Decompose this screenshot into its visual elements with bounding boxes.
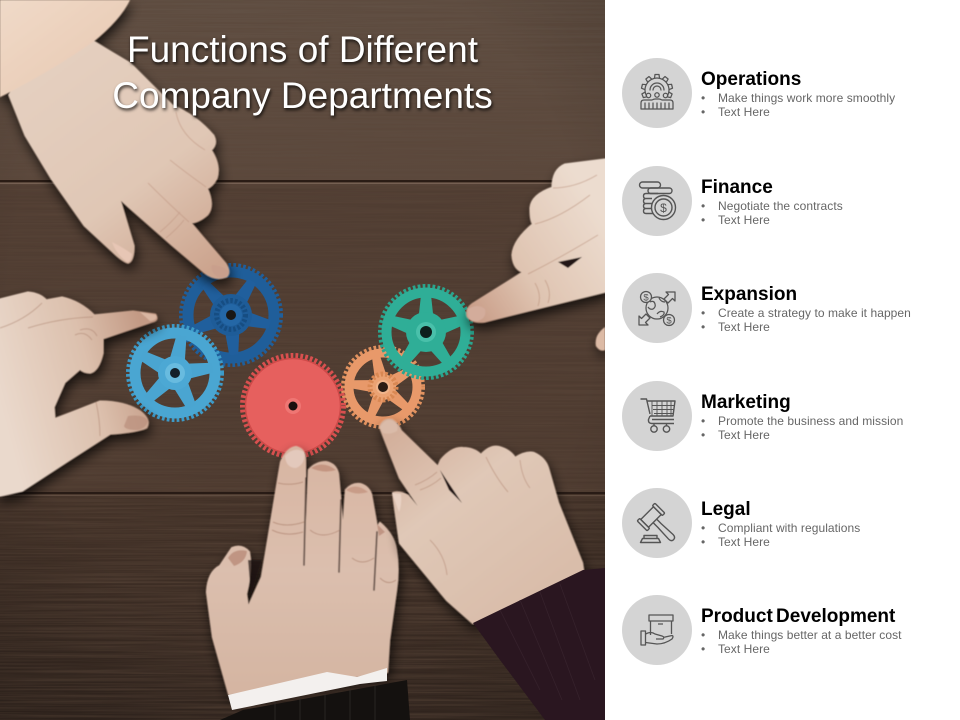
icon: stacked coins: $ xyxy=(660,201,667,215)
heading: Product Development xyxy=(701,606,895,627)
bullet list: Text Here xyxy=(718,213,770,227)
bullet list xyxy=(702,199,843,227)
gear: light blue xyxy=(128,326,222,420)
bullet list: Text Here xyxy=(718,320,770,334)
icon: globe with coins and arrows xyxy=(622,273,692,343)
hand: right xyxy=(468,160,605,350)
icon: globe with coins and arrows: $ xyxy=(666,316,672,326)
icon: shopping cart xyxy=(622,381,692,451)
bullet list: Promote the business and mission xyxy=(718,414,903,428)
wood table background xyxy=(0,0,605,720)
heading: Marketing xyxy=(701,392,791,413)
heading: Legal xyxy=(701,499,751,520)
heading: Expansion xyxy=(701,284,797,305)
bullet list xyxy=(702,306,911,334)
panel: Finance xyxy=(622,166,843,236)
panel: Product Development xyxy=(622,595,902,665)
title: Company Departments xyxy=(112,75,493,116)
panel: Expansion xyxy=(622,273,911,343)
icon: globe with coins and arrows: $ xyxy=(643,292,649,304)
bullet list: Text Here xyxy=(718,105,770,119)
hand: top left with sleeve xyxy=(0,0,229,277)
hand: left xyxy=(0,293,156,495)
icon: gavel xyxy=(622,488,692,558)
photo: hands pointing at coloured gears on a wood table xyxy=(0,0,605,720)
bullet list: Text Here xyxy=(718,642,770,656)
bullet list: Make things better at a better cost xyxy=(718,628,902,642)
bullet list: Text Here xyxy=(718,535,770,549)
bullet list: Compliant with regulations xyxy=(718,521,860,535)
title xyxy=(112,29,494,120)
heading: Finance xyxy=(701,177,773,198)
icon: stacked coins xyxy=(622,166,692,236)
panel: Legal xyxy=(622,488,860,558)
bullet list xyxy=(702,628,902,656)
title: Functions of Different xyxy=(127,29,478,70)
icon: box on open hand xyxy=(622,595,692,665)
bullet list: Make things work more smoothly xyxy=(718,91,895,105)
hand: bottom centre with cuff and jacket xyxy=(207,447,410,720)
gear: dark blue xyxy=(182,266,280,364)
heading: Operations xyxy=(701,69,801,90)
bullet list xyxy=(702,521,860,549)
bullet list xyxy=(702,414,903,442)
icon: gear with team xyxy=(622,58,692,128)
bullet list xyxy=(702,91,895,119)
bullet list: Create a strategy to make it happen xyxy=(718,306,911,320)
gear: orange xyxy=(344,348,422,426)
bullet list: Text Here xyxy=(718,428,770,442)
hand: bottom right with dark sleeve xyxy=(380,420,605,720)
bullet list: Negotiate the contracts xyxy=(718,199,843,213)
gear: red xyxy=(242,356,344,456)
panel: Marketing xyxy=(622,381,903,451)
gear: teal xyxy=(380,286,472,378)
panel: Operations xyxy=(622,58,895,128)
